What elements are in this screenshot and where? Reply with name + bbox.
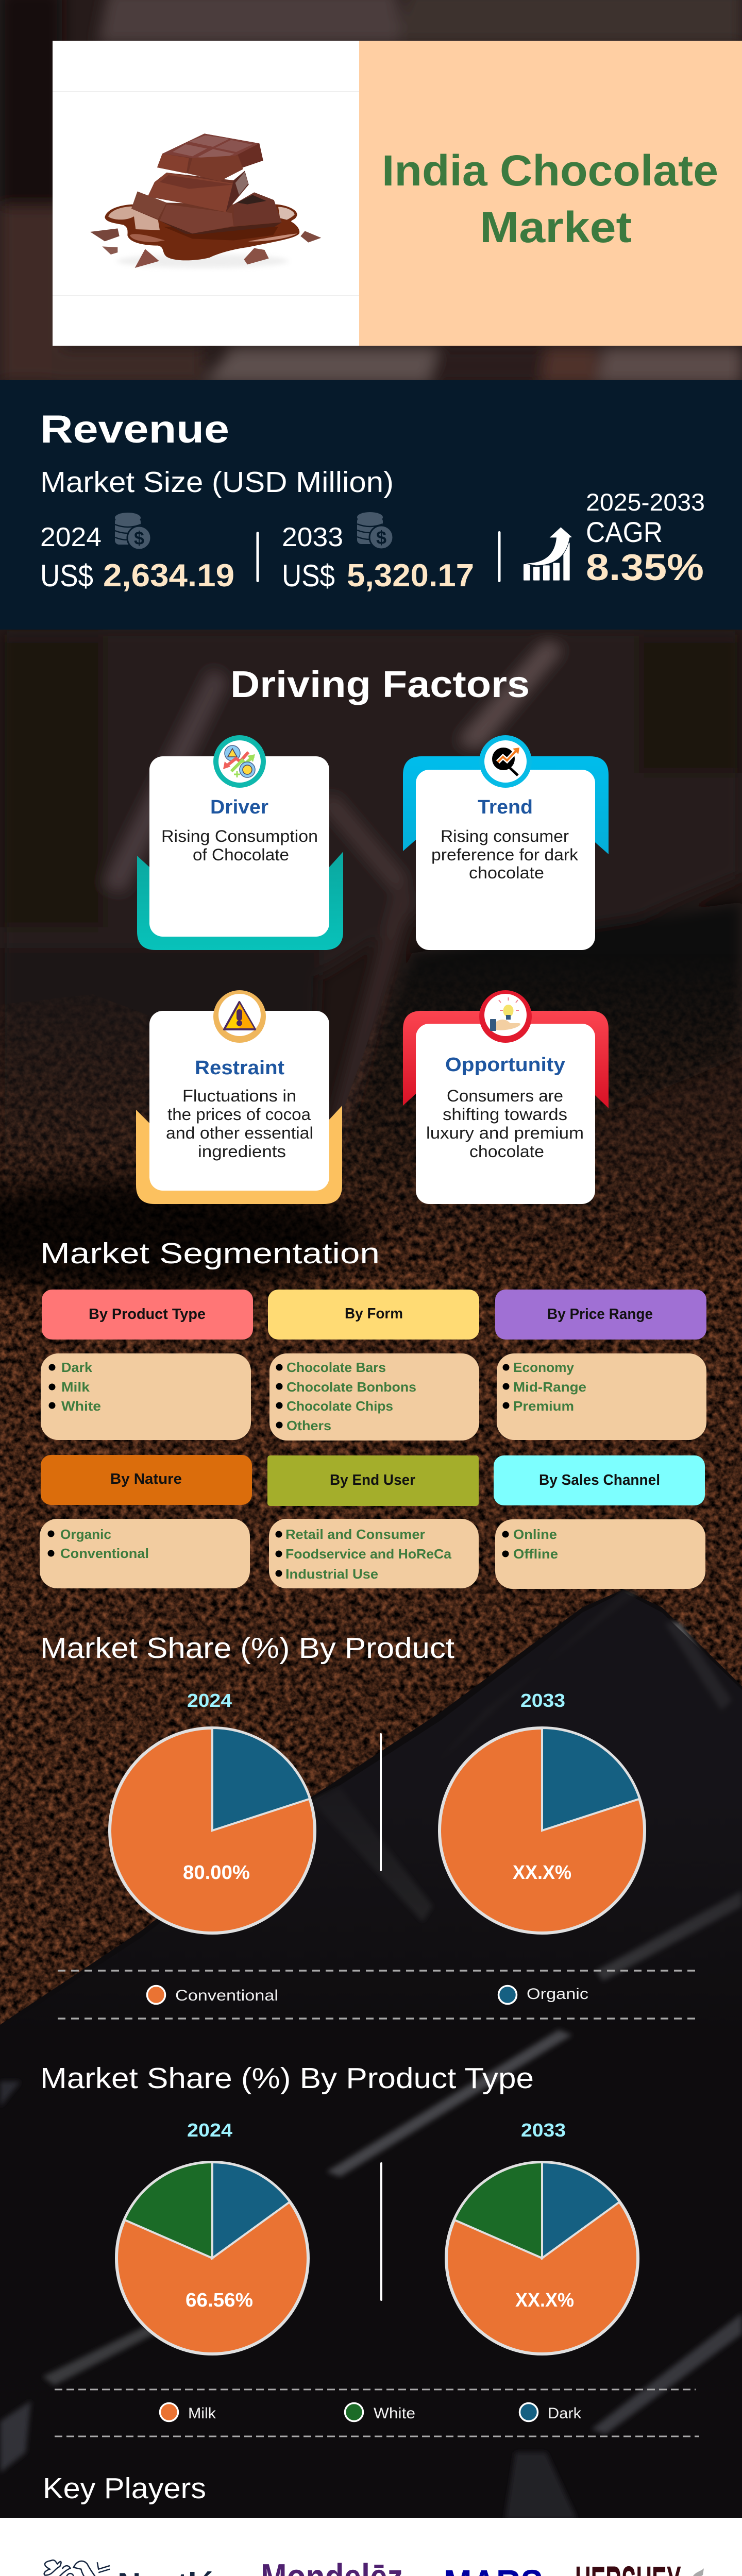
- segment: by product type: By Product Type: [89, 1306, 206, 1323]
- restraint text: the prices of cocoa: [167, 1105, 311, 1124]
- opportunity heading: Opportunity: [445, 1054, 565, 1076]
- revenue heading: Revenue: [40, 408, 229, 451]
- 2024 value: 2,634.19: [103, 558, 234, 594]
- segment: by sales channel: [494, 1455, 705, 1589]
- revenue panel: [0, 380, 742, 630]
- restraint text: Fluctuations in: [182, 1087, 296, 1105]
- heading: market share by product: Market Share (%) By Product: [40, 1632, 454, 1665]
- icon: coins 2033: [357, 512, 393, 549]
- driver text: of Chocolate: [193, 845, 289, 864]
- 2024 value: US$: [40, 558, 93, 593]
- segment: by form: Others: [286, 1418, 331, 1433]
- segment: by nature: By Nature: [110, 1471, 182, 1487]
- segment: by form: [268, 1290, 479, 1440]
- background: dark chocolate ridges: [0, 1592, 742, 2519]
- segment: by product type: [41, 1290, 253, 1440]
- trend text: Rising consumer: [441, 827, 569, 845]
- pie chart: product 2024: 80.00%: [183, 1862, 250, 1884]
- driver text: Rising Consumption: [161, 827, 318, 845]
- pie chart: product type 2033: [446, 2120, 638, 2354]
- cagr: CAGR: [586, 516, 663, 548]
- segment: by nature: Conventional: [60, 1546, 149, 1561]
- panel: key players: [0, 2518, 742, 2576]
- 2033 value: 2033: [282, 522, 343, 552]
- card: restraint: [136, 990, 342, 1204]
- driver heading: Driver: [210, 796, 268, 818]
- segment: by price range: By Price Range: [547, 1306, 653, 1323]
- icon: driver: [213, 735, 266, 788]
- opportunity text: Consumers are: [447, 1087, 563, 1105]
- pie chart: product 2024: [110, 1690, 315, 1933]
- segment: by nature: [40, 1455, 252, 1588]
- opportunity text: [426, 1087, 584, 1161]
- pie chart: product 2024: 2024: [187, 1690, 232, 1711]
- title panel: [359, 41, 742, 346]
- legend: product type: White: [374, 2405, 415, 2422]
- segment: by sales channel: Online: [513, 1527, 557, 1542]
- card: driver: [137, 735, 343, 950]
- pie chart: product 2033: 2033: [520, 1690, 565, 1711]
- 2024 value: 2024: [40, 522, 102, 552]
- segment: by end user: [267, 1455, 479, 1588]
- segment: by price range: Premium: [513, 1398, 574, 1414]
- pie chart: product 2033: XX.X%: [513, 1862, 571, 1884]
- legend: product type: [55, 2389, 699, 2436]
- opportunity text: shifting towards: [443, 1105, 567, 1124]
- pie chart: product type 2024: 66.56%: [185, 2290, 253, 2311]
- trend text: chocolate: [469, 863, 544, 882]
- 2024 value: [40, 522, 234, 594]
- segment: by form: Chocolate Bars: [286, 1360, 386, 1375]
- legend: product type: Milk: [188, 2405, 216, 2422]
- title panel: India Chocolate: [382, 146, 718, 195]
- pie chart: product 2033: [440, 1690, 645, 1933]
- legend: product type: Dark: [548, 2405, 582, 2422]
- title panel: Market: [480, 203, 632, 251]
- logo: nestle: [43, 2560, 215, 2576]
- pie chart: product type 2033: XX.X%: [515, 2290, 574, 2311]
- pie chart: product type 2024: [116, 2120, 308, 2354]
- heading: market segmentation: Market Segmentation: [40, 1237, 380, 1270]
- hero panel: [53, 41, 742, 346]
- market size label: Market Size (USD Million): [40, 466, 394, 499]
- segment: by product type: Milk: [61, 1379, 90, 1395]
- segment: by sales channel: Offline: [513, 1546, 558, 1562]
- driver text: [161, 827, 318, 864]
- segment: by form: By Form: [345, 1306, 403, 1322]
- icon: restraint: [213, 990, 266, 1043]
- segment: by end user: Foodservice and HoReCa: [285, 1546, 452, 1562]
- segment: by product type: Dark: [61, 1360, 93, 1375]
- restraint text: [166, 1087, 313, 1161]
- 2033 value: 5,320.17: [347, 558, 474, 594]
- icon: coins 2024: [115, 513, 151, 550]
- segment: by end user: By End User: [330, 1472, 415, 1488]
- image panel: chocolate bars: [53, 41, 359, 346]
- segment: by end user: Industrial Use: [285, 1566, 378, 1582]
- 2033 value: US$: [282, 558, 335, 593]
- segment: by form: Chocolate Chips: [286, 1398, 393, 1414]
- trend text: [431, 827, 579, 882]
- restraint text: and other essential: [166, 1124, 313, 1142]
- opportunity text: luxury and premium: [426, 1124, 584, 1142]
- background: lower chocolate block shading: [0, 1592, 742, 2040]
- card: opportunity: [403, 990, 609, 1204]
- segment: by form: Chocolate Bonbons: [286, 1379, 416, 1395]
- heading: market share by product type: Market Share (%) By Product Type: [40, 2062, 534, 2095]
- restraint heading: Restraint: [195, 1057, 284, 1079]
- opportunity text: chocolate: [469, 1142, 544, 1161]
- restraint text: ingredients: [198, 1142, 286, 1161]
- divider: [257, 532, 259, 582]
- card: trend: [403, 735, 609, 950]
- icon: growth chart: [524, 527, 572, 581]
- trend heading: Trend: [478, 796, 533, 818]
- segment: by price range: [495, 1290, 706, 1440]
- divider: [380, 2162, 382, 2301]
- icon: coins 2033: $: [376, 527, 386, 548]
- segment: by nature: Organic: [60, 1527, 111, 1542]
- legend: product: Organic: [527, 1986, 588, 2003]
- cagr: 8.35%: [586, 547, 704, 588]
- divider: [380, 1733, 382, 1871]
- cagr: 2025-2033: [586, 488, 705, 516]
- icon: opportunity: [479, 990, 532, 1043]
- background: cocoa powder texture: [0, 984, 742, 2025]
- 2033 value: [282, 522, 474, 594]
- cagr: [586, 488, 705, 588]
- divider: [498, 531, 501, 582]
- legend: product: Conventional: [175, 1987, 278, 2004]
- pie chart: product type 2024: 2024: [187, 2120, 232, 2141]
- segment: by sales channel: By Sales Channel: [539, 1472, 660, 1488]
- heading: driving factors: Driving Factors: [230, 664, 530, 705]
- pie chart: product type 2033: 2033: [521, 2120, 566, 2141]
- icon: trend: [479, 735, 532, 788]
- segment: by product type: White: [61, 1398, 101, 1414]
- legend: product: [58, 1971, 700, 2019]
- heading: key players: Key Players: [43, 2472, 206, 2505]
- trend text: preference for dark: [431, 845, 579, 864]
- segment: by price range: Economy: [513, 1360, 575, 1375]
- icon: coins 2024: $: [134, 528, 144, 549]
- segment: by end user: Retail and Consumer: [285, 1527, 425, 1542]
- segment: by price range: Mid-Range: [513, 1379, 586, 1395]
